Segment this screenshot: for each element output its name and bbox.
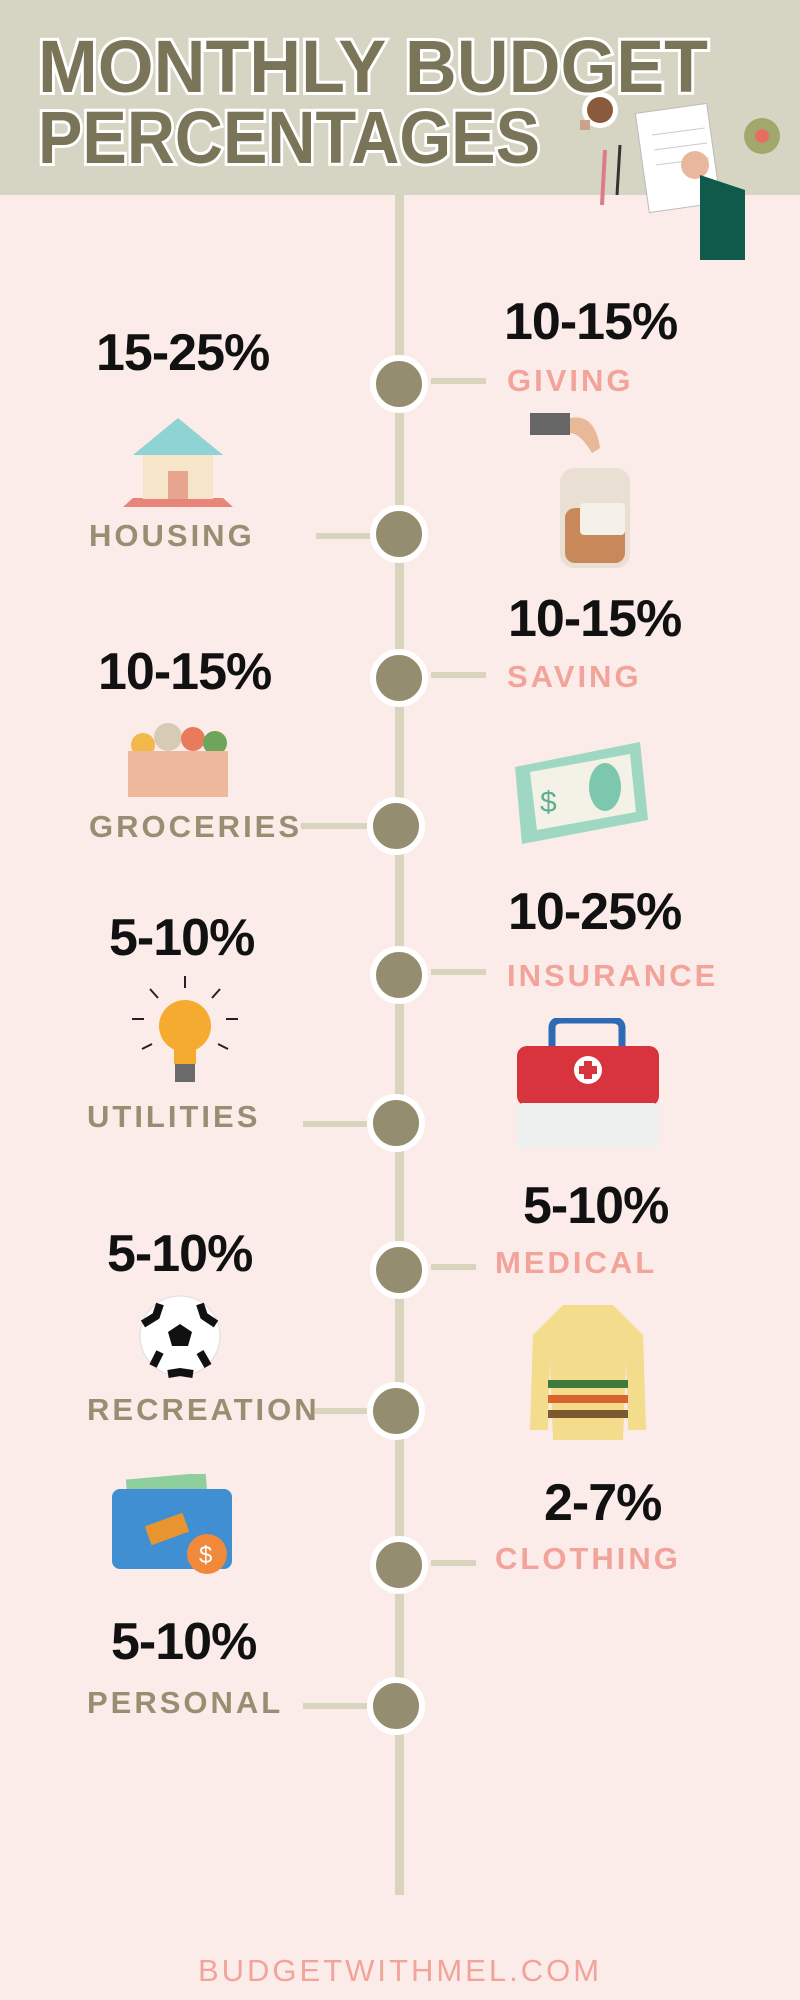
item: giving: GIVING [507,363,634,398]
header band [0,0,800,195]
item: clothing [370,1474,681,1594]
icon: house [123,418,233,507]
item: housing: HOUSING [89,518,255,553]
item: groceries: GROCERIES [89,809,302,844]
item: utilities: 5-10% [109,909,254,967]
item: utilities [87,909,425,1152]
item: groceries [89,643,425,855]
item: groceries: 10-15% [98,643,271,701]
item: saving: 10-15% [508,590,681,648]
icon: medical kit [517,1018,659,1148]
icon: grocery box [128,723,228,797]
title: MONTHLY BUDGET [38,25,708,108]
icon: wallet [112,1474,232,1574]
icon: coin jar [530,413,630,568]
item: recreation: RECREATION [87,1392,320,1427]
item: personal: 5-10% [111,1613,256,1671]
item: giving [370,293,677,413]
item: recreation: 5-10% [107,1225,252,1283]
icon: banknote [515,742,648,844]
footer url: BUDGETWITHMEL.COM [198,1953,602,1988]
item: medical: MEDICAL [495,1245,657,1280]
timeline line [395,195,404,1895]
item: clothing: 2-7% [544,1474,661,1532]
title: PERCENTAGES [38,96,540,179]
icon: soccer ball [140,1296,220,1378]
icon: wallet: $ [199,1542,212,1569]
item: housing: 15-25% [96,324,269,382]
item: recreation [87,1225,425,1440]
item: saving [370,590,681,707]
icon: sweater [530,1305,646,1440]
item: saving: SAVING [507,659,642,694]
item: medical: 5-10% [523,1177,668,1235]
illustration: desk with coffee, notebook and hand [580,92,780,260]
item: personal [87,1474,425,1735]
item: insurance: INSURANCE [507,958,718,993]
icon: banknote: $ [540,786,557,819]
item: utilities: UTILITIES [87,1099,260,1134]
item: insurance [370,883,718,1004]
icon: light bulb [132,976,238,1082]
item: insurance: 10-25% [508,883,681,941]
item: personal: PERSONAL [87,1685,283,1720]
item: housing [89,324,428,563]
item: clothing: CLOTHING [495,1541,681,1576]
item: medical [370,1177,668,1299]
title [38,25,710,179]
item: giving: 10-15% [504,293,677,351]
